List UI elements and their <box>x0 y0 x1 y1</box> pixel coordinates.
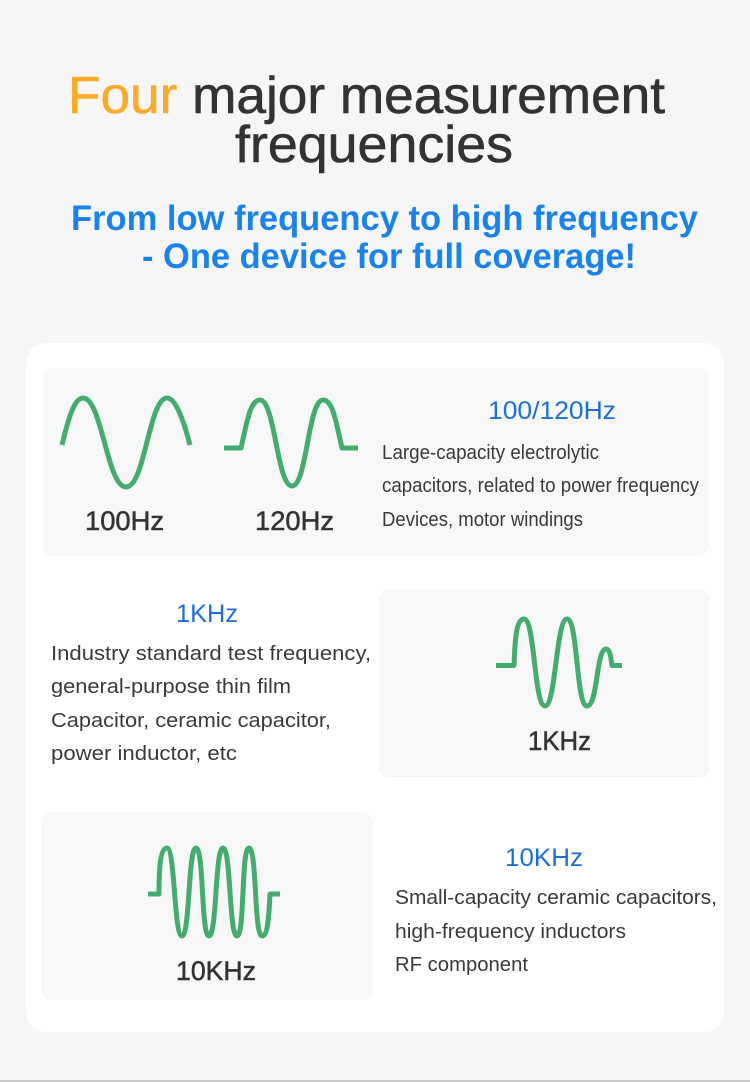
text: 100/120Hz description: Devices, motor windings <box>382 509 583 531</box>
label: 120Hz: 120Hz <box>255 506 334 536</box>
text: 100/120Hz description <box>382 442 699 531</box>
title: frequencies <box>235 116 513 174</box>
text: 10KHz description: Small-capacity ceramic capacitors, <box>395 887 717 909</box>
subtitle <box>71 199 699 276</box>
heading: 10KHz: 10KHz <box>505 844 583 872</box>
label: 10KHz: 10KHz <box>176 956 256 986</box>
panel: 1KHz <box>379 589 710 778</box>
label: 100Hz: 100Hz <box>85 506 164 536</box>
text: 100/120Hz description: Large-capacity electrolytic <box>382 442 599 464</box>
icon: 10KHz wave <box>148 848 280 936</box>
text: 1KHz description <box>51 643 371 765</box>
icon: 100Hz wave <box>62 398 190 487</box>
text: 100/120Hz description: capacitors, related to power frequency <box>382 475 699 497</box>
panel: 10KHz <box>41 812 373 1000</box>
text: 1KHz description: Industry standard test frequency, <box>51 643 371 665</box>
text: 10KHz description <box>395 887 717 976</box>
text: 1KHz description: Capacitor, ceramic capacitor, <box>51 710 331 732</box>
text: 1KHz description: power inductor, etc <box>51 743 237 765</box>
subtitle: From low frequency to high frequency <box>71 199 699 238</box>
text: 10KHz description: RF component <box>395 954 528 976</box>
text: 1KHz description: general-purpose thin film <box>51 676 291 698</box>
panel: main card <box>26 343 724 1032</box>
panel: 100/120Hz <box>42 368 709 556</box>
subtitle: - One device for full coverage! <box>142 237 636 276</box>
icon: 1KHz wave <box>496 619 622 706</box>
icon: 120Hz wave <box>224 400 358 486</box>
label: 1KHz: 1KHz <box>528 726 591 756</box>
heading: 1KHz: 1KHz <box>176 600 238 628</box>
text: 10KHz description: high-frequency inductors <box>395 921 626 943</box>
title: Four major measurement <box>68 67 666 125</box>
heading: 100/120Hz: 100/120Hz <box>488 397 616 425</box>
title <box>68 67 666 174</box>
